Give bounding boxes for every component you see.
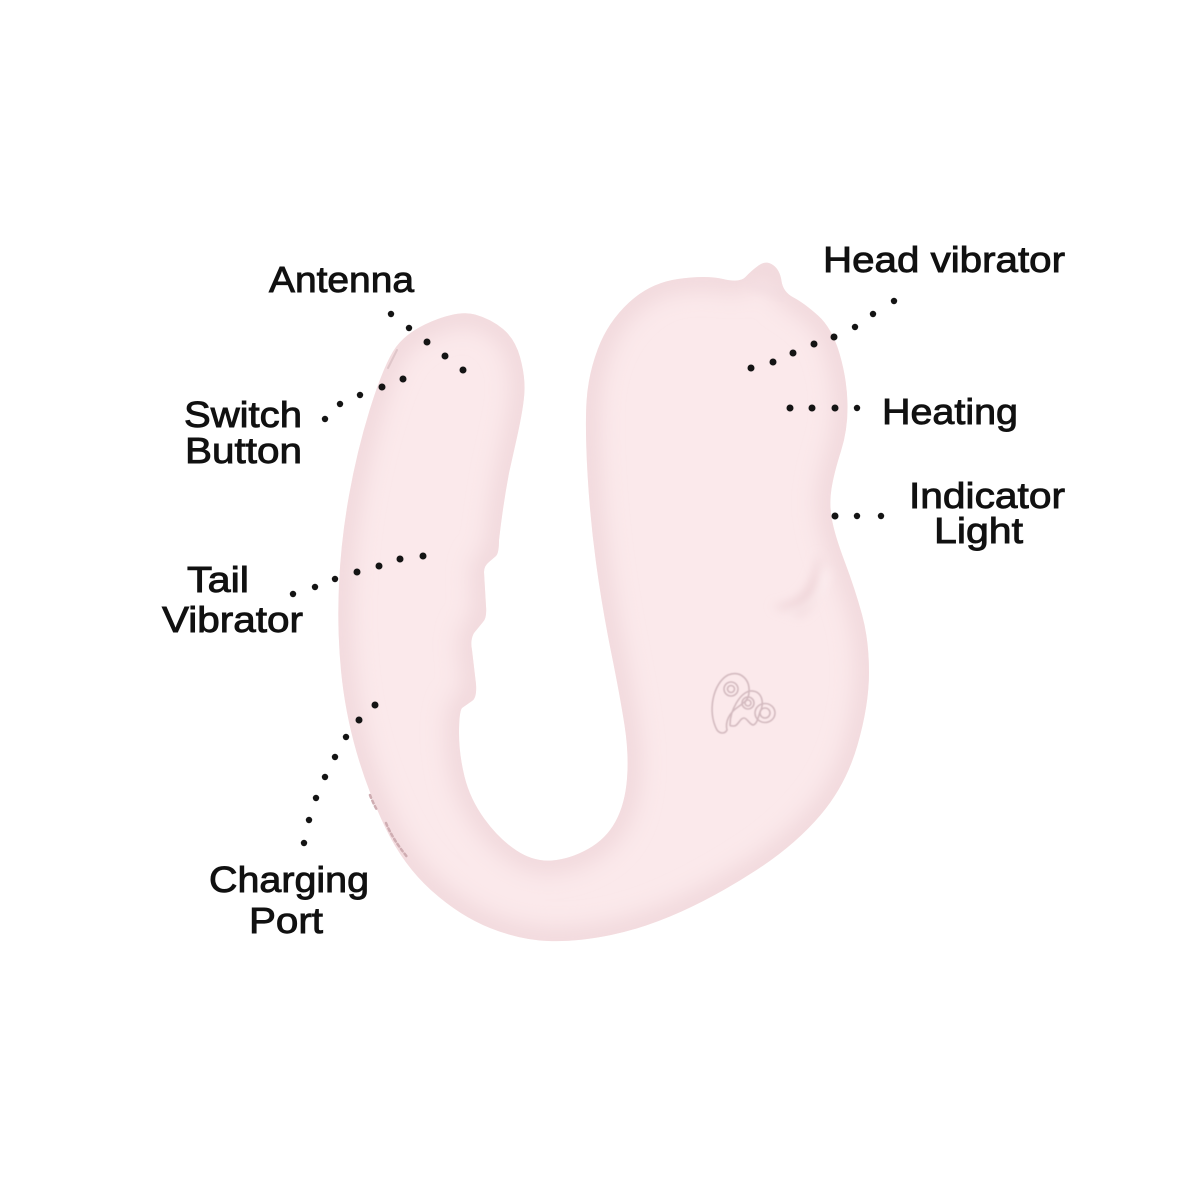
label: switch button — [184, 394, 302, 471]
label: indicator light — [909, 475, 1065, 551]
dotted leader: heating — [786, 404, 860, 412]
dotted leader: head vibrator — [748, 298, 897, 372]
label: switch button: Button — [185, 430, 302, 471]
label: tail vibrator — [162, 559, 303, 640]
dotted leader: indicator light — [832, 512, 884, 520]
label: tail vibrator: Tail — [187, 559, 249, 600]
label: antenna: Antenna — [269, 259, 415, 300]
dotted leader: antenna — [388, 311, 466, 374]
label: heating: Heating — [882, 391, 1018, 432]
horn shading — [748, 282, 786, 296]
dotted leader: charging port — [301, 702, 378, 846]
device body — [338, 263, 869, 941]
label: indicator light: Indicator — [909, 475, 1065, 516]
switch button edge — [388, 350, 397, 368]
fin shading — [782, 568, 819, 615]
label: indicator light: Light — [934, 510, 1023, 551]
label: charging port: Charging — [209, 859, 369, 900]
label: charging port — [209, 859, 369, 941]
dotted leader: tail vibrator — [290, 552, 426, 597]
dotted leader: switch button — [322, 376, 406, 422]
label: charging port: Port — [249, 900, 323, 941]
logo emboss — [712, 674, 775, 733]
label: head vibrator: Head vibrator — [823, 239, 1065, 280]
fin highlight — [792, 584, 820, 612]
label: switch button: Switch — [184, 394, 302, 435]
label: tail vibrator: Vibrator — [162, 599, 303, 640]
charging port buttons — [370, 795, 408, 858]
